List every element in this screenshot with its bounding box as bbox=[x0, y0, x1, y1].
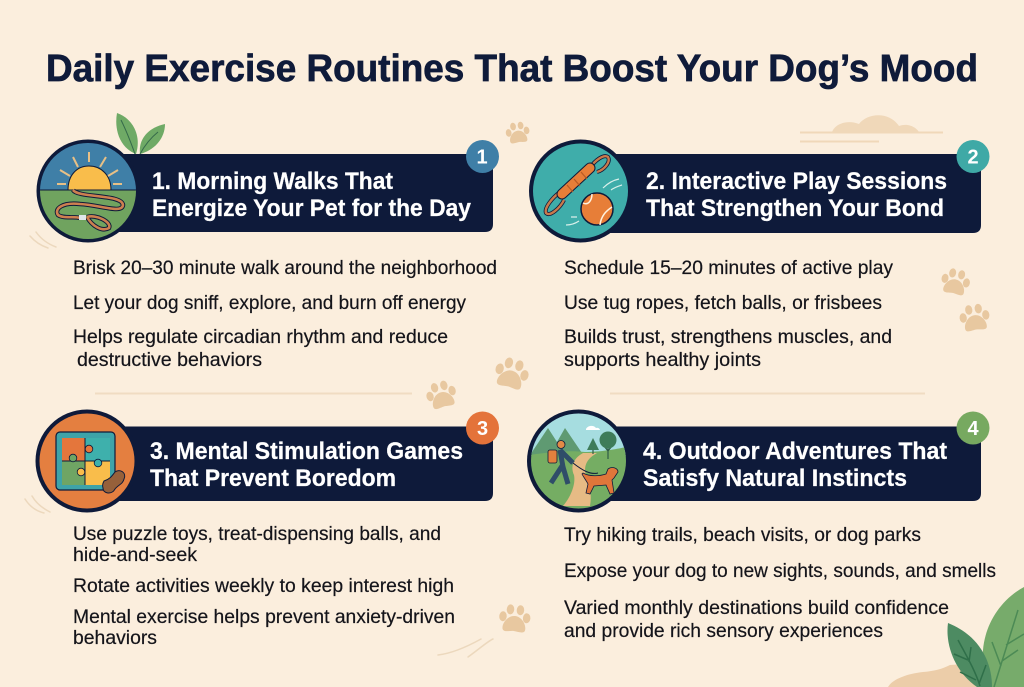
bullets 4: Try hiking trails, beach visits, or dog parks bbox=[564, 524, 921, 546]
icon: rope and ball bbox=[529, 140, 632, 242]
card 4: outdoor adventures bbox=[527, 410, 996, 642]
decoration: paw bottom centre bbox=[498, 603, 531, 633]
heading 4: 4. Outdoor Adventures That bbox=[643, 438, 947, 465]
heading 1: Energize Your Pet for the Day bbox=[152, 195, 472, 222]
bullets 3: hide-and-seek bbox=[73, 544, 197, 566]
bullets 2: Schedule 15–20 minutes of active play bbox=[564, 257, 893, 279]
decoration: paw near card 1 bbox=[505, 121, 531, 144]
banner 4 bbox=[600, 426, 981, 501]
bullets 2: supports healthy joints bbox=[564, 349, 761, 371]
heading 1: 1. Morning Walks That bbox=[152, 168, 393, 195]
bullets 1: Helps regulate circadian rhythm and reduce bbox=[73, 326, 448, 348]
bullets 1: destructive behaviors bbox=[77, 349, 262, 371]
bullets 1 bbox=[73, 257, 497, 371]
icon: sunrise and leash bbox=[36, 140, 140, 242]
title: Daily Exercise Routines That Boost Your Dog’s Mood bbox=[46, 48, 978, 90]
badge 2 bbox=[956, 140, 990, 173]
decoration: paw centre lower bbox=[423, 378, 459, 411]
bullets 4: and provide rich sensory experiences bbox=[564, 620, 883, 642]
heading 3: 3. Mental Stimulation Games bbox=[150, 438, 463, 465]
decoration: cloud and lines bbox=[800, 115, 943, 142]
bullets 1: Let your dog sniff, explore, and burn off energy bbox=[73, 292, 466, 314]
banner 1 bbox=[110, 154, 493, 232]
bullets 4 bbox=[564, 524, 996, 642]
heading 3: That Prevent Boredom bbox=[150, 465, 396, 492]
banner 3 bbox=[115, 426, 493, 501]
bullets 3 bbox=[73, 523, 455, 649]
bullets 3: Rotate activities weekly to keep interest high bbox=[73, 575, 454, 597]
decoration: paw right upper bbox=[939, 266, 972, 297]
bullets 3: behaviors bbox=[73, 627, 157, 649]
icon: hiker and dog bbox=[527, 410, 630, 512]
decoration: paw centre upper bbox=[492, 355, 532, 392]
badge 2: 2 bbox=[967, 146, 979, 168]
bullets 1: Brisk 20–30 minute walk around the neighborhood bbox=[73, 257, 497, 279]
bullets 3: Use puzzle toys, treat-dispensing balls, and bbox=[73, 523, 441, 545]
bullets 4: Expose your dog to new sights, sounds, and smells bbox=[564, 560, 996, 582]
bullets 2: Builds trust, strengthens muscles, and bbox=[564, 326, 892, 348]
card 2: interactive play bbox=[529, 140, 990, 371]
badge 4: 4 bbox=[967, 418, 979, 440]
bullets 2 bbox=[564, 257, 893, 371]
badge 3: 3 bbox=[477, 418, 488, 440]
badge 4 bbox=[956, 412, 990, 444]
card 1: morning walks bbox=[36, 113, 499, 371]
heading 2: That Strengthen Your Bond bbox=[646, 195, 944, 222]
banner 2 bbox=[600, 154, 981, 233]
decoration: corner foliage bbox=[888, 587, 1024, 687]
card 3: mental stimulation bbox=[36, 410, 499, 649]
badge 3 bbox=[466, 412, 499, 444]
badge 1 bbox=[466, 140, 499, 173]
bullets 3: Mental exercise helps prevent anxiety-driven bbox=[73, 606, 455, 628]
icon: puzzle and treat bbox=[36, 410, 138, 512]
heading 2: 2. Interactive Play Sessions bbox=[646, 168, 947, 195]
heading 4: Satisfy Natural Instincts bbox=[643, 465, 907, 492]
bullets 4: Varied monthly destinations build confidence bbox=[564, 597, 949, 619]
leaves bbox=[116, 113, 165, 154]
decoration: paw right lower bbox=[958, 302, 991, 332]
bullets 2: Use tug ropes, fetch balls, or frisbees bbox=[564, 292, 882, 314]
badge 1: 1 bbox=[476, 146, 488, 168]
